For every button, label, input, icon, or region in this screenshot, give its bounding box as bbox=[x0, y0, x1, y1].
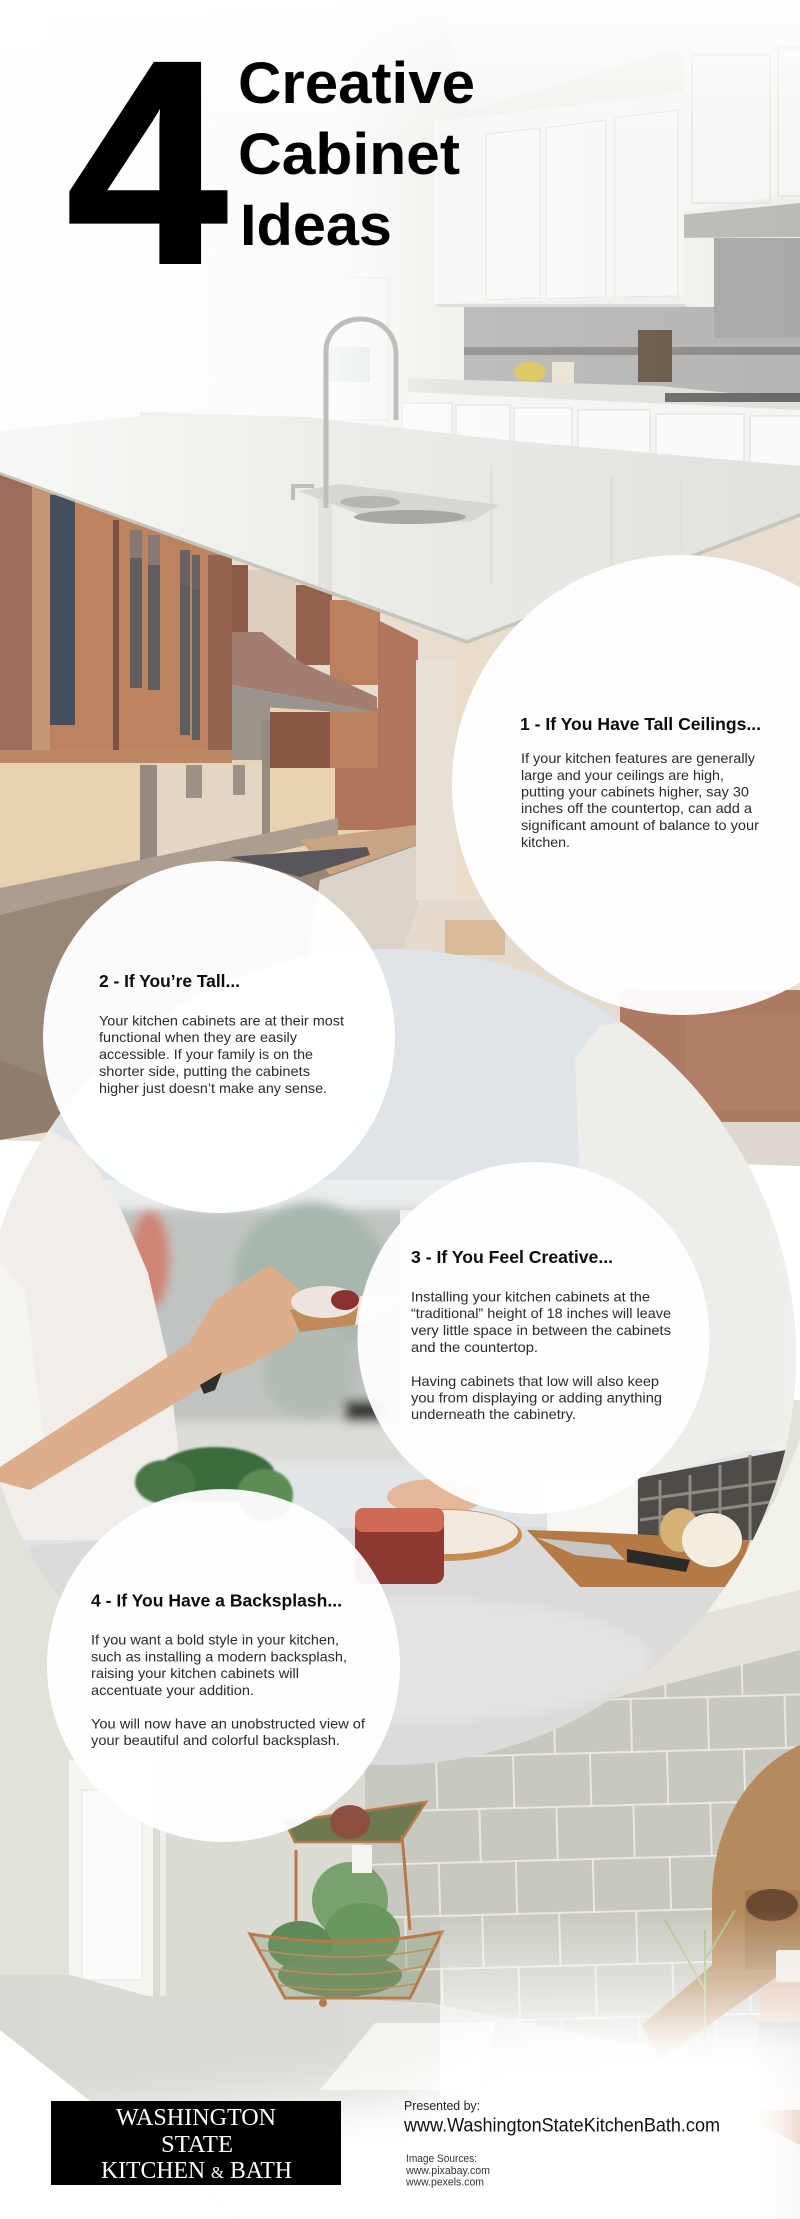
presented by bbox=[403, 2098, 720, 2136]
body text 4 bbox=[91, 1632, 365, 1748]
plaid shorts bbox=[638, 1450, 790, 1540]
title text: Creative bbox=[238, 51, 475, 116]
body text 2: higher just doesn’t make any sense. bbox=[99, 1081, 327, 1096]
artichokes bbox=[268, 1862, 402, 1997]
right side white fade bbox=[440, 1910, 800, 2050]
left wood cabinets bbox=[0, 470, 232, 763]
body text 1 bbox=[521, 751, 759, 850]
towel bbox=[320, 2023, 440, 2090]
circle panel 1 bbox=[452, 555, 800, 1015]
fridge bbox=[416, 660, 420, 900]
lower counter and drawers bbox=[402, 378, 800, 472]
logo box bbox=[51, 2101, 341, 2185]
salt jar bbox=[758, 1950, 800, 2150]
title text bbox=[238, 51, 475, 258]
body text 2: functional when they are easily bbox=[99, 1030, 297, 1045]
title text: Cabinet bbox=[238, 122, 460, 187]
man in white shirt bbox=[400, 1020, 800, 1480]
lower basket bbox=[250, 1932, 442, 1998]
white door bbox=[69, 1760, 166, 2000]
tile wall bbox=[365, 1650, 800, 2017]
island countertop bbox=[0, 413, 800, 644]
lower cabinets bbox=[318, 846, 418, 950]
body text 4: such as installing a modern backsplash, bbox=[91, 1650, 347, 1664]
body text 3: very little space in between the cabinets bbox=[411, 1323, 671, 1338]
middle cabinets bbox=[434, 92, 686, 307]
heading 2: 2 - If You’re Tall... bbox=[99, 971, 240, 991]
body text 2: accessible. If your family is on the bbox=[99, 1047, 313, 1062]
hand on counter bbox=[387, 1479, 483, 1515]
sink bbox=[298, 484, 500, 524]
woman's sweater bbox=[0, 1120, 178, 1540]
body text 3: Having cabinets that low will also keep bbox=[411, 1374, 659, 1389]
body text 4: your beautiful and colorful backsplash. bbox=[91, 1733, 340, 1748]
body text 4: raising your kitchen cabinets will bbox=[91, 1666, 299, 1681]
dining chairs bbox=[8, 415, 168, 480]
logo box: STATE bbox=[161, 2132, 233, 2158]
upper right cabinets bbox=[672, 11, 800, 212]
presented by: Presented by: bbox=[404, 2098, 480, 2113]
marble countertop bbox=[0, 1525, 800, 1780]
range hood bbox=[671, 203, 800, 238]
photo: kitchen food circle bbox=[0, 949, 800, 1780]
presented by: www.WashingtonStateKitchenBath.com bbox=[403, 2114, 720, 2136]
blurred back cabinet bbox=[104, 1180, 768, 1210]
forearm and hand bbox=[0, 1265, 300, 1490]
body text 2: shorter side, putting the cabinets bbox=[99, 1064, 310, 1079]
cutting board bbox=[527, 1530, 750, 1587]
countertop reflections bbox=[318, 465, 683, 610]
title text: Ideas bbox=[240, 193, 392, 258]
circle panel 4 bbox=[47, 1489, 400, 1842]
chimney of hood bbox=[232, 565, 296, 655]
cutting board bbox=[642, 1745, 800, 2060]
body text 3: you from displaying or adding anything bbox=[411, 1390, 662, 1406]
logo box: WASHINGTON bbox=[116, 2105, 276, 2131]
sprig bbox=[664, 1910, 736, 2036]
body text 1: significant amount of balance to your bbox=[521, 818, 759, 833]
right wood cabinet bbox=[620, 990, 800, 1123]
heading 4: 4 - If You Have a Backsplash... bbox=[91, 1590, 342, 1610]
pepper mill knob bbox=[746, 1889, 798, 1921]
body text 1: large and your ceilings are high, bbox=[521, 768, 724, 783]
image sources bbox=[405, 2153, 490, 2188]
body text 2 bbox=[99, 1014, 344, 1096]
body text 3 bbox=[411, 1290, 671, 1422]
body text 1: inches off the countertop, can add a bbox=[521, 801, 752, 816]
outlet bbox=[352, 1845, 372, 1873]
faucet bbox=[293, 319, 396, 508]
heading 3: 3 - If You Feel Creative... bbox=[411, 1247, 613, 1267]
countertop edge bbox=[0, 472, 800, 650]
image sources: Image Sources: bbox=[406, 2153, 477, 2165]
logo box: KITCHEN & BATH bbox=[101, 2158, 292, 2184]
bracelet bbox=[200, 1372, 222, 1394]
body text 3: Installing your kitchen cabinets at the bbox=[411, 1290, 650, 1304]
image sources: www.pixabay.com bbox=[405, 2165, 490, 2177]
photo: wood kitchen bbox=[0, 470, 800, 1180]
knife bbox=[537, 1538, 690, 1572]
wall oven bbox=[308, 278, 388, 420]
right upper cabinet bbox=[707, 1440, 800, 1613]
wall bbox=[0, 700, 378, 888]
granite counter bbox=[0, 818, 338, 915]
top white fade bbox=[0, 0, 800, 660]
photo: white kitchen bbox=[0, 0, 800, 660]
circle panel 2 bbox=[43, 861, 395, 1213]
body text 1: putting your cabinets higher, say 30 bbox=[521, 784, 749, 800]
image sources: www.pexels.com bbox=[405, 2176, 484, 2188]
body text 3: underneath the cabinetry. bbox=[411, 1407, 576, 1422]
pale wash bbox=[0, 475, 800, 1175]
bottom white fade bbox=[0, 2040, 800, 2219]
body text 4: If you want a bold style in your kitchen, bbox=[91, 1632, 339, 1648]
stove bbox=[230, 847, 370, 877]
countertop bbox=[0, 1975, 800, 2219]
body text 1: kitchen. bbox=[521, 835, 570, 850]
tile backsplash bbox=[140, 700, 270, 862]
range hood bbox=[232, 632, 377, 712]
bread bbox=[660, 1508, 742, 1567]
body text 4: You will now have an unobstructed view of bbox=[91, 1716, 365, 1732]
backsplash bbox=[464, 238, 800, 395]
ramekin bbox=[547, 1480, 637, 1540]
body text 1: If your kitchen features are generally bbox=[521, 751, 755, 766]
plant bbox=[135, 1447, 293, 1521]
body text 2: Your kitchen cabinets are at their most bbox=[99, 1014, 344, 1028]
tiered basket with artichokes bbox=[250, 1802, 442, 2007]
wall beside door bbox=[360, 1771, 365, 1996]
plate bbox=[368, 1509, 522, 1561]
floor bbox=[402, 906, 418, 950]
basket uprights bbox=[296, 1835, 410, 1930]
woman's sleeve bbox=[0, 1240, 45, 1490]
body text 3: “traditional” height of 18 inches will leave bbox=[411, 1306, 671, 1321]
upper right wood cabinets bbox=[270, 585, 418, 830]
jam jar bbox=[355, 1508, 444, 1584]
upper basket bbox=[285, 1802, 426, 1842]
title numeral: 4 bbox=[67, 2, 229, 324]
circle panel 3 bbox=[358, 1162, 710, 1514]
blurred backdrop bbox=[120, 1196, 417, 1462]
body text 4: accentuate your addition. bbox=[91, 1683, 254, 1698]
body text 3: and the countertop. bbox=[411, 1340, 538, 1355]
heading 1: 1 - If You Have Tall Ceilings... bbox=[520, 714, 761, 734]
toast bbox=[290, 1286, 400, 1332]
lower left woven texture bbox=[0, 1060, 60, 1140]
photo: lower kitchen with tiles bbox=[0, 1400, 800, 2219]
